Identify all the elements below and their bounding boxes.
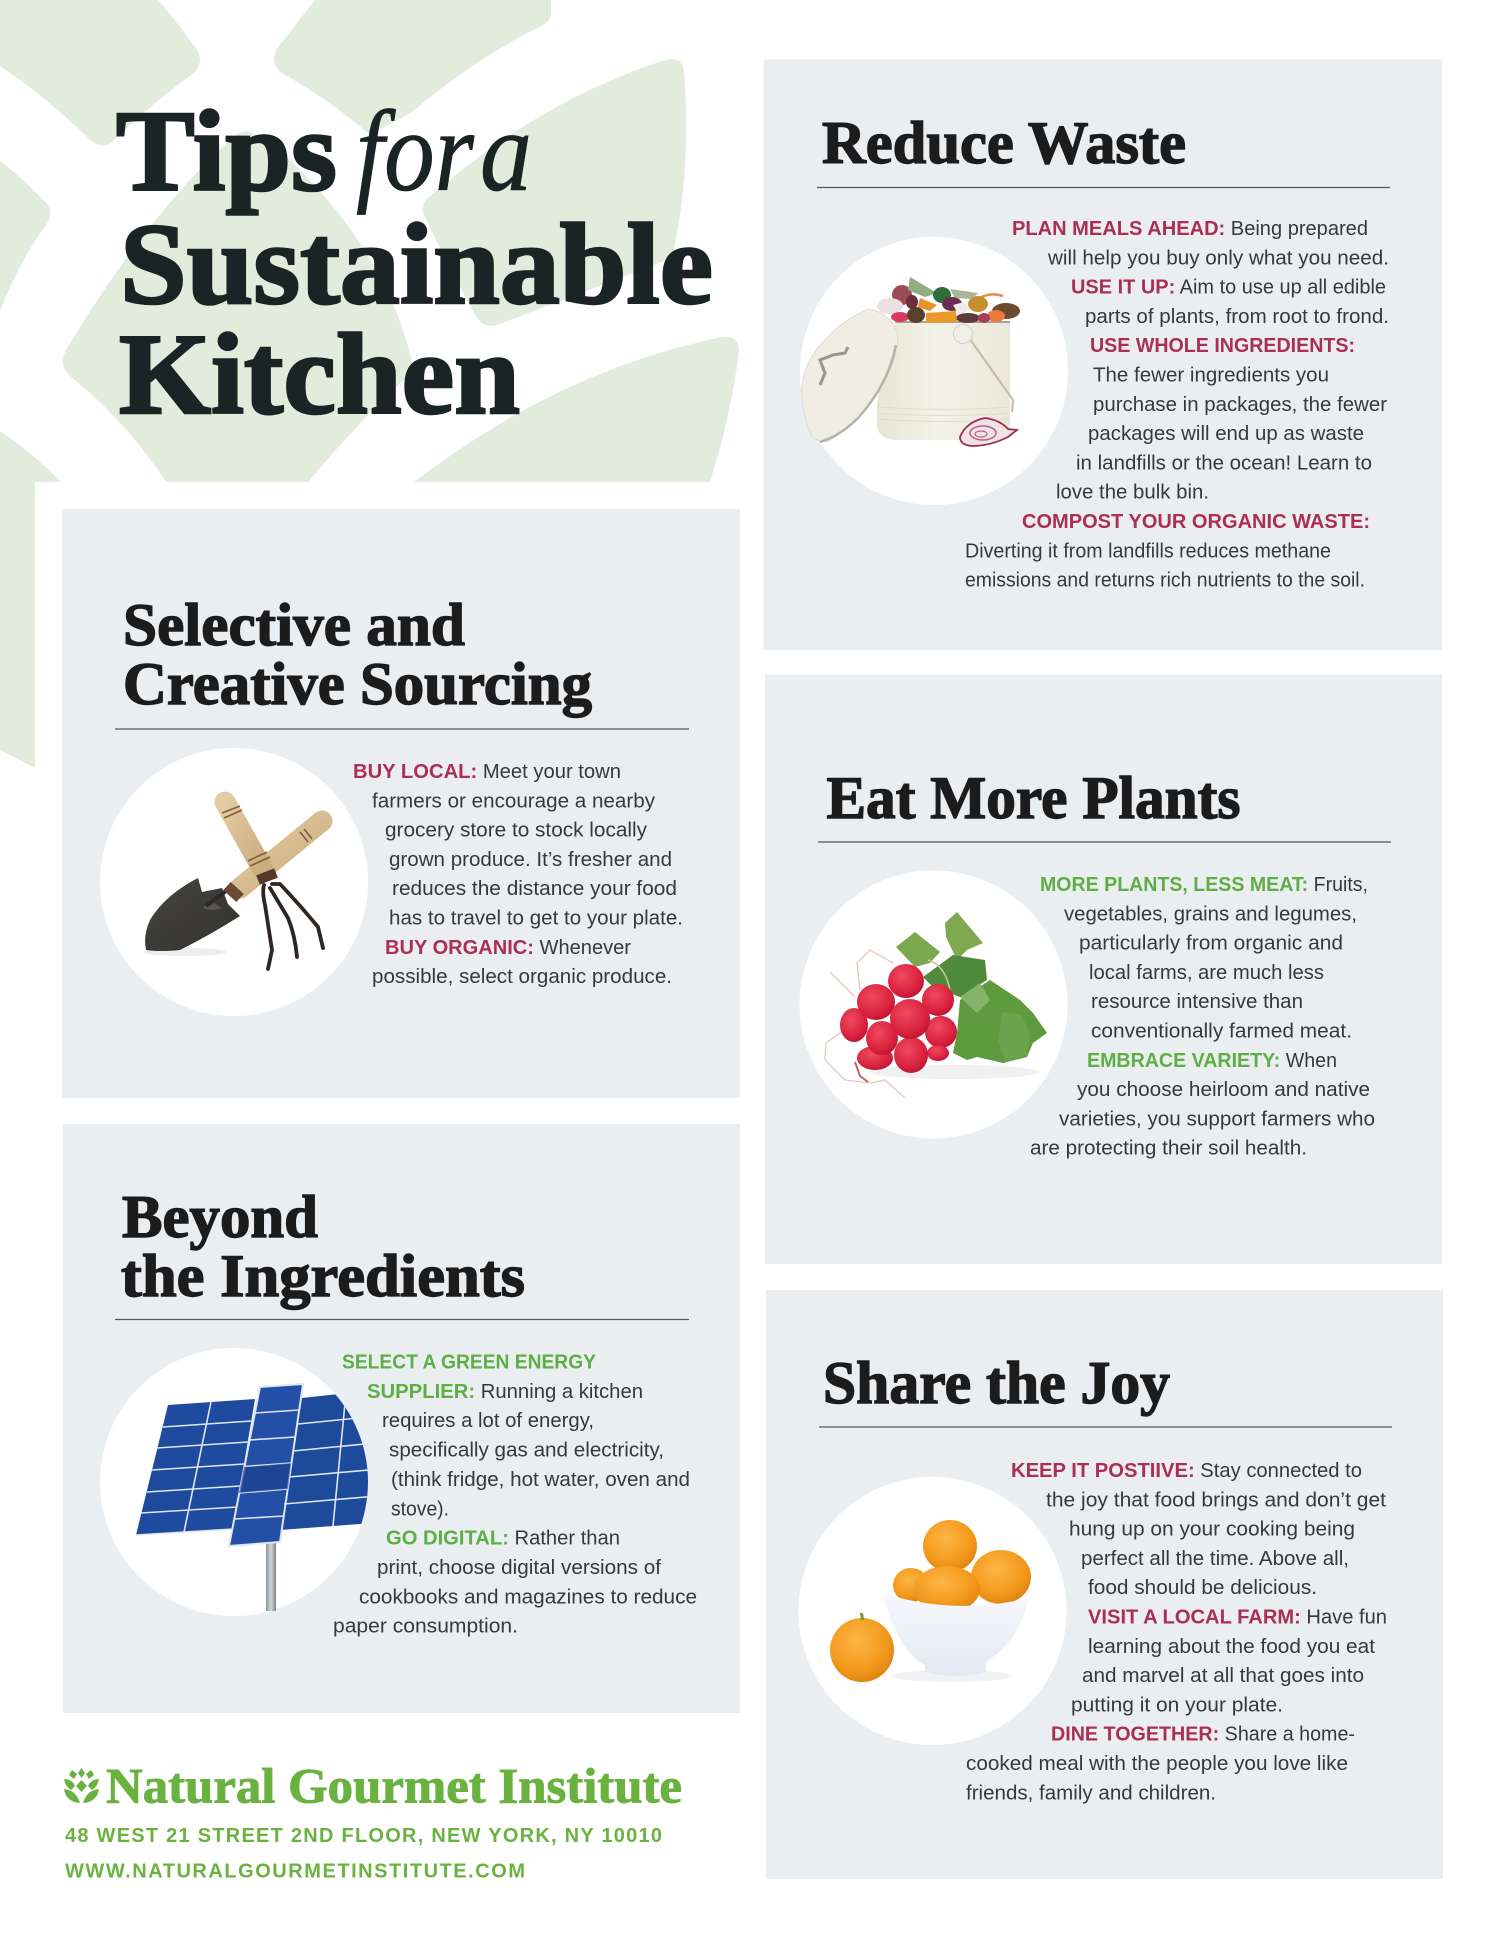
text: share the joy tips: DINE TOGETHER: Share a home- [1051, 1724, 1355, 1746]
text: share the joy tips: perfect all the time. Above all, [1081, 1548, 1349, 1570]
text: reduce waste tips: emissions and returns rich nutrients to the soil. [965, 570, 1365, 592]
text: eat more plants tips: conventionally farmed meat. [1091, 1020, 1352, 1042]
title: Sustainable [120, 201, 713, 329]
title: Tips [116, 88, 337, 216]
text: eat more plants tips: vegetables, grains and legumes, [1064, 903, 1357, 925]
text: eat more plants tips: you choose heirloom and native [1077, 1079, 1370, 1101]
title: Kitchen [119, 311, 520, 439]
text: reduce waste tips: COMPOST YOUR ORGANIC WASTE: [1022, 511, 1370, 533]
text: eat more plants tips: particularly from organic and [1079, 933, 1343, 955]
text: buy local and buy organic: BUY ORGANIC: Whenever [385, 937, 631, 959]
text: eat more plants tips: EMBRACE VARIETY: When [1087, 1050, 1337, 1072]
text: reduce waste tips: parts of plants, from root to frond. [1085, 306, 1389, 328]
panel: share the joy [766, 1290, 1443, 1879]
icon: garden trowel and fork [100, 748, 368, 1016]
text: share the joy tips: putting it on your plate. [1071, 1694, 1283, 1716]
title: a [480, 88, 532, 216]
panel: eat more plants [765, 674, 1442, 1264]
footer: natural gourmet institute: 48 WEST 21 STREET 2ND FLOOR, NEW YORK, NY 10010 [65, 1825, 662, 1847]
text: eat more plants tips: local farms, are much less [1089, 962, 1324, 984]
text: green energy and go digital: paper consumption. [333, 1616, 518, 1638]
text: share the joy tips: the joy that food brings and don’t get [1046, 1489, 1386, 1511]
heading: beyond the ingredients: the Ingredients [121, 1243, 525, 1309]
heading: selective and creative sourcing: Selective and [123, 592, 465, 658]
text: buy local and buy organic: reduces the distance your food [392, 878, 677, 900]
bin lid [802, 309, 898, 442]
text: reduce waste tips: The fewer ingredients you [1093, 364, 1329, 386]
text: share the joy tips [966, 1460, 1387, 1804]
text: green energy and go digital: GO DIGITAL: Rather than [386, 1528, 620, 1550]
icon: radishes [800, 870, 1068, 1138]
text: green energy and go digital: requires a lot of energy, [382, 1410, 594, 1432]
text: buy local and buy organic [353, 761, 683, 988]
text: green energy and go digital: specifically gas and electricity, [389, 1440, 664, 1462]
text: reduce waste tips: packages will end up as waste [1088, 423, 1364, 445]
title: for [356, 88, 475, 216]
text: reduce waste tips: will help you buy only what you need. [1047, 247, 1389, 269]
text: eat more plants tips: are protecting their soil health. [1030, 1138, 1307, 1160]
icon: artichoke logo [64, 1768, 99, 1803]
icon: solar panels [100, 1348, 368, 1616]
text: reduce waste tips: love the bulk bin. [1056, 482, 1209, 504]
text: buy local and buy organic: farmers or encourage a nearby [372, 790, 655, 812]
icon: oranges in a bowl [798, 1477, 1066, 1745]
onion slice [960, 418, 1017, 446]
background leaf pattern [0, 0, 739, 768]
panel: selective and creative sourcing [62, 509, 740, 1098]
text: green energy and go digital: SELECT A GREEN ENERGY [342, 1352, 597, 1374]
text: share the joy tips: KEEP IT POSTIIVE: Stay connected to [1011, 1460, 1362, 1482]
text: share the joy tips: VISIT A LOCAL FARM: Have fun [1088, 1606, 1387, 1628]
text: green energy and go digital [333, 1352, 697, 1638]
text: green energy and go digital: print, choose digital versions of [377, 1557, 661, 1579]
text: share the joy tips: food should be delicious. [1088, 1577, 1317, 1599]
radish leaves [896, 912, 1047, 1063]
text: reduce waste tips: USE WHOLE INGREDIENTS: [1090, 335, 1355, 357]
text: green energy and go digital: (think fridge, hot water, oven and [391, 1469, 690, 1491]
text: reduce waste tips: purchase in packages, the fewer [1093, 394, 1387, 416]
heading: selective and creative sourcing [123, 592, 592, 717]
heading: eat more plants: Eat More Plants [826, 765, 1240, 831]
text: reduce waste tips: PLAN MEALS AHEAD: Being prepared [1012, 218, 1368, 240]
panel: reduce waste [764, 60, 1442, 650]
text: buy local and buy organic: BUY LOCAL: Meet your town [353, 761, 621, 783]
heading: reduce waste: Reduce Waste [822, 110, 1186, 176]
text: share the joy tips: learning about the food you eat [1088, 1636, 1375, 1658]
heading: beyond the ingredients: Beyond [122, 1184, 318, 1250]
compost scraps [877, 277, 1020, 323]
radish bulbs [840, 964, 957, 1073]
text: buy local and buy organic: has to travel to get to your plate. [389, 908, 683, 930]
text: share the joy tips: cooked meal with the people you love like [966, 1753, 1348, 1775]
text: reduce waste tips: USE IT UP: Aim to use up all edible [1071, 277, 1386, 299]
text: reduce waste tips [965, 218, 1389, 592]
lone orange [830, 1613, 894, 1682]
title [116, 88, 713, 439]
text: share the joy tips: hung up on your cooking being [1069, 1519, 1355, 1541]
text: green energy and go digital: SUPPLIER: Running a kitchen [367, 1381, 643, 1403]
text: buy local and buy organic: possible, select organic produce. [372, 966, 672, 988]
text: reduce waste tips: in landfills or the ocean! Learn to [1076, 452, 1372, 474]
footer: natural gourmet institute [64, 1758, 682, 1882]
text: share the joy tips: friends, family and children. [966, 1782, 1216, 1804]
text: eat more plants tips: varieties, you support farmers who [1059, 1108, 1375, 1130]
footer: natural gourmet institute: WWW.NATURALGOURMETINSTITUTE.COM [65, 1860, 525, 1882]
heading: selective and creative sourcing: Creative Sourcing [123, 651, 592, 717]
icon: compost bin [800, 237, 1068, 505]
panel: beyond the ingredients [63, 1124, 740, 1713]
text: eat more plants tips: MORE PLANTS, LESS MEAT: Fruits, [1040, 874, 1368, 896]
text: buy local and buy organic: grown produce. It’s fresher and [389, 849, 672, 871]
text: green energy and go digital: stove). [391, 1498, 449, 1520]
text: reduce waste tips: Diverting it from landfills reduces methane [965, 540, 1331, 562]
text: eat more plants tips [1030, 874, 1375, 1160]
text: green energy and go digital: cookbooks and magazines to reduce [359, 1586, 697, 1608]
footer: natural gourmet institute: Natural Gourmet Institute [106, 1758, 682, 1814]
text: eat more plants tips: resource intensive than [1091, 991, 1303, 1013]
heading: share the joy: Share the Joy [823, 1350, 1170, 1416]
heading: beyond the ingredients [121, 1184, 525, 1309]
text: share the joy tips: and marvel at all that goes into [1082, 1665, 1364, 1687]
text: buy local and buy organic: grocery store to stock locally [385, 820, 647, 842]
